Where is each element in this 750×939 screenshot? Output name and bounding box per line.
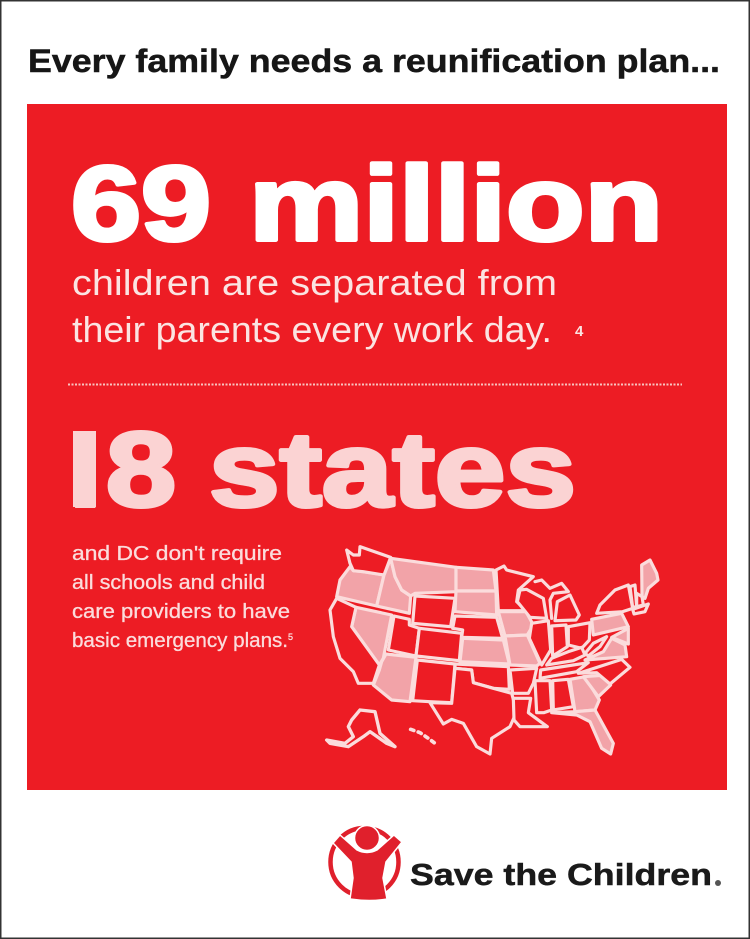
text: children separated description: 4 [575, 323, 584, 340]
text: children separated description [72, 262, 584, 350]
text: emergency plans description: all schools and child [72, 572, 265, 594]
text: children separated description: children are separated from [72, 262, 557, 303]
registered mark [715, 880, 721, 886]
Hawaii [411, 729, 435, 743]
states without required plans (dark red) [330, 547, 648, 754]
text: emergency plans description: and DC don't require [72, 543, 282, 565]
stat: 18 states: 1 [73, 411, 96, 529]
Alaska [327, 710, 395, 747]
stat: 18 states: states [209, 411, 576, 529]
states with required plans (light pink) [337, 558, 658, 754]
text: emergency plans description: care providers to have [72, 601, 290, 623]
text: emergency plans description [72, 543, 293, 652]
stat: 18 states [73, 411, 576, 529]
text: emergency plans description: 5 [288, 632, 293, 642]
stat: 18 states: 8 [106, 411, 176, 529]
stat: 69 million: million [249, 145, 663, 263]
logo: Save the Children wordmark: Save the Children [410, 857, 712, 892]
title: Every family needs a reunification plan... [28, 43, 720, 79]
chart: US map of states [327, 547, 658, 754]
panel: red statistics background [27, 104, 727, 790]
text: emergency plans description: basic emergency plans. [72, 630, 288, 652]
stat: 69 million: 69 [71, 145, 211, 263]
text: children separated description: their parents every work day. [72, 309, 552, 350]
logo: Save the Children emblem [330, 826, 402, 900]
stat: 69 million [71, 145, 663, 263]
